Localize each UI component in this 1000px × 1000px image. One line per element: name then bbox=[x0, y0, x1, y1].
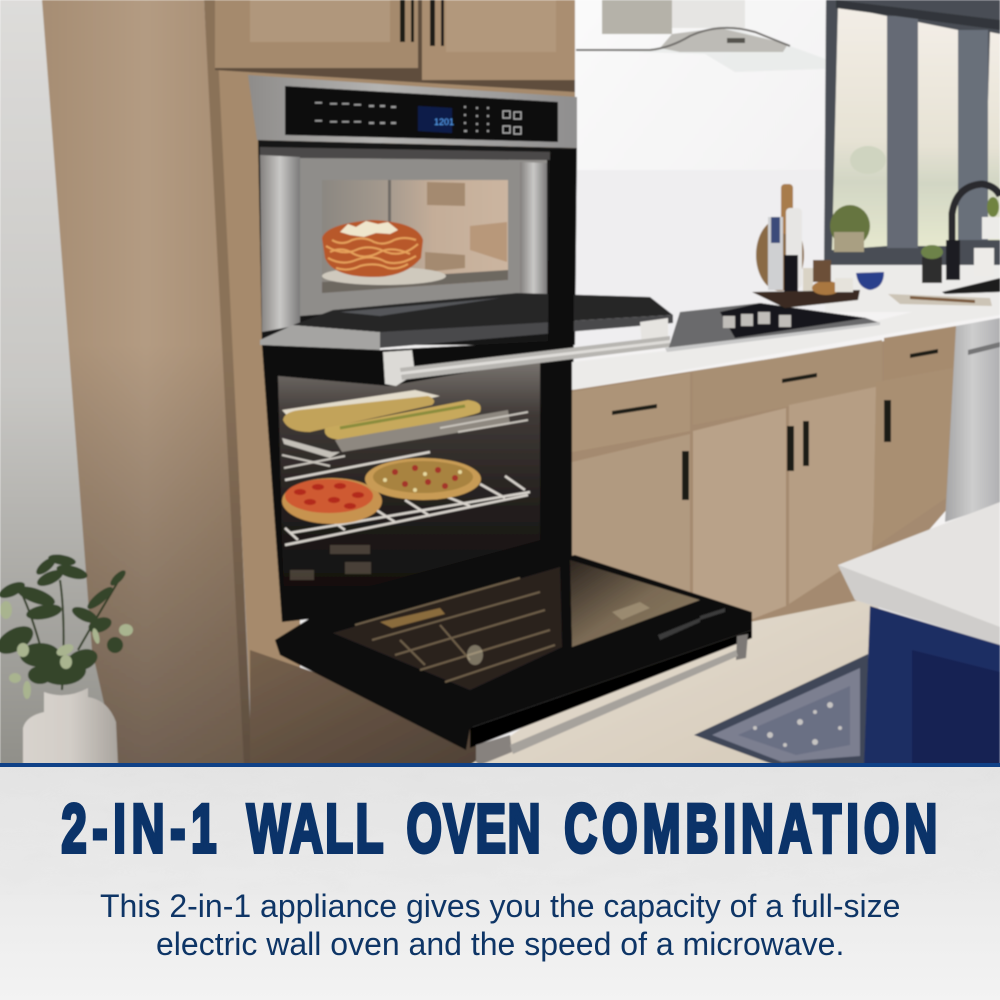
panel buttons bbox=[315, 102, 489, 132]
countertop items bbox=[752, 184, 1000, 308]
title: WALL bbox=[247, 791, 383, 867]
control panel bbox=[248, 75, 577, 148]
dishwasher bbox=[945, 318, 1000, 522]
description text: This 2-in-1 appliance gives you the capacity of a full-size bbox=[100, 888, 900, 924]
base cabinets bbox=[572, 326, 956, 622]
caption band bbox=[0, 763, 1000, 1000]
kitchen island bbox=[838, 502, 1000, 765]
main oven cavity bbox=[262, 150, 575, 622]
microwave body bbox=[258, 140, 577, 345]
window bbox=[824, 0, 1000, 265]
title: OVEN bbox=[407, 791, 541, 867]
oven door handle bbox=[470, 630, 752, 765]
rug bbox=[694, 654, 868, 765]
title bbox=[61, 791, 937, 867]
floor bbox=[470, 580, 880, 765]
plant stems bbox=[20, 575, 122, 690]
left wall bbox=[0, 0, 125, 765]
herb pot on sill bbox=[830, 205, 870, 252]
dark leaves bbox=[0, 553, 128, 685]
tall cabinet side panel bbox=[42, 0, 252, 765]
lower cabinet below oven bbox=[250, 650, 480, 765]
range hood bbox=[576, 0, 850, 72]
open oven door bbox=[275, 555, 752, 750]
cooktop knobs bbox=[723, 312, 791, 328]
backsplash wall bbox=[570, 0, 1000, 360]
cabinet front around oven bbox=[218, 55, 575, 700]
lasagna dish bbox=[322, 220, 446, 285]
oven display digits: 1201 bbox=[434, 117, 454, 127]
title: 2-IN-1 bbox=[61, 791, 216, 867]
description text: electric wall oven and the speed of a microwave. bbox=[156, 926, 844, 962]
kitchen photo scene bbox=[0, 0, 1000, 765]
plant bbox=[0, 553, 133, 699]
countertop with cooktop bbox=[572, 290, 1000, 390]
light leaves bbox=[0, 601, 133, 699]
upper rack with bread bbox=[282, 390, 528, 468]
vase bbox=[23, 688, 118, 765]
upper cabinets bbox=[215, 0, 575, 92]
title: COMBINATION bbox=[564, 791, 937, 867]
description text bbox=[100, 888, 900, 962]
microwave door handle bbox=[383, 318, 670, 386]
lower rack with pizzas bbox=[282, 452, 530, 545]
microwave open door bbox=[260, 293, 673, 352]
